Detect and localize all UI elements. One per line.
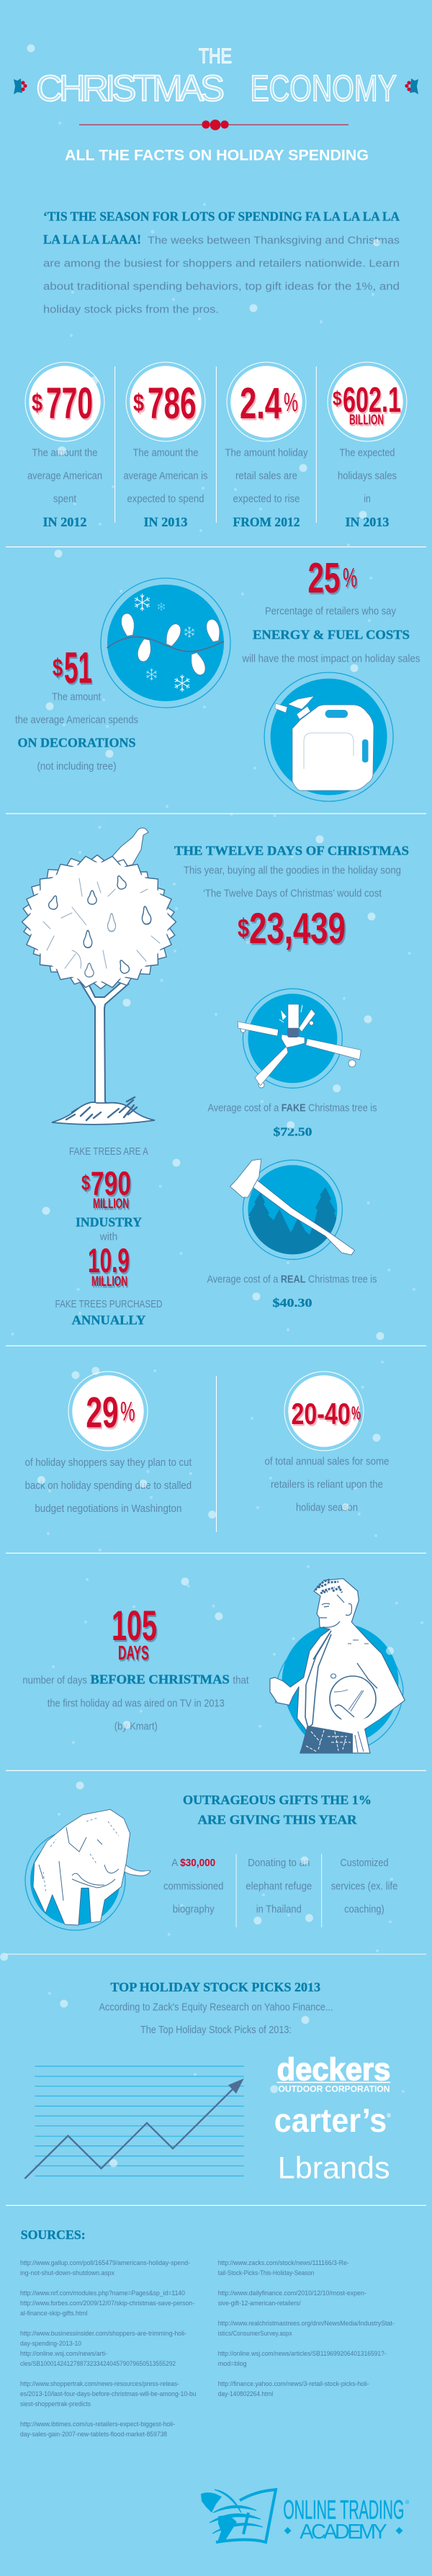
stat: 20-40% of annual sales: [265, 1372, 389, 1514]
sources right column: day-140802264.html: [218, 2390, 273, 2398]
stat: 2.4% from 2012: FROM 2012: [233, 515, 300, 529]
twelve days of christmas: [174, 843, 409, 953]
stat: $51 on decorations: (not including tree): [37, 761, 117, 773]
stat: 105 days before christmas: the first holiday ad was aired on TV in 2013: [48, 1698, 225, 1710]
stat: $770 in 2012: average American: [27, 470, 102, 482]
subtitle: ALL THE FACTS ON HOLIDAY SPENDING: [65, 146, 369, 164]
sources left column: cles/SB10001424127887323342404579079650513555292: [20, 2360, 176, 2368]
fake tree cost: $72.50: [274, 1125, 312, 1138]
sources left column: es/2013-10/last-four-days-before-christmas-will-be-among-10-bu: [20, 2390, 196, 2398]
stat: $602.1 billion in 2013: $: [333, 387, 342, 410]
stat: $602.1 billion in 2013: holidays sales: [338, 470, 397, 482]
stat: 25% energy and fuel costs: will have the most impact on holiday sales: [242, 654, 420, 665]
gift columns: coaching): [344, 1904, 384, 1915]
sources heading: SOURCES:: [21, 2228, 86, 2242]
stat: $786 in 2013: IN 2013: [144, 515, 187, 529]
stat: $602.1 billion in 2013: in: [364, 494, 371, 505]
stat: $770 in 2012: IN 2012: [43, 515, 86, 529]
shorts: [300, 1726, 353, 1753]
ornament divider with berries: [79, 120, 348, 130]
sources left column: http://www.ibtimes.com/us-retailers-expect-biggest-holi-: [20, 2420, 175, 2428]
stat: $51 on decorations: the average American spends: [15, 714, 138, 726]
sources left column: al-finance-skip-gifts.html: [20, 2310, 87, 2318]
gift columns: biography: [173, 1904, 215, 1915]
line chart with rising arrow: [24, 2066, 244, 2179]
fake tree cost: Average cost of a FAKE Christmas tree is: [207, 1102, 377, 1114]
intro paragraph: [43, 210, 400, 316]
logo: deckers: deckers: [277, 2052, 390, 2087]
twelve days of christmas: This year, buying all the goodies in the holiday song: [184, 865, 401, 876]
sources left column: [20, 2259, 196, 2438]
gift columns: commissioned: [163, 1881, 223, 1892]
sources left column: http://www.gallup.com/poll/165479/americans-holiday-spend-: [20, 2259, 190, 2267]
bird: [109, 828, 148, 868]
stat: $786 in 2013: [124, 362, 207, 529]
sources left column: ing-not-shut-down-shutdown.aspx: [20, 2269, 114, 2277]
stat: 105 days before christmas: BEFORE CHRISTMAS: [91, 1672, 230, 1686]
stat: $770 in 2012: spent: [53, 494, 76, 505]
stat: 2.4% from 2012: 2.4: [240, 379, 282, 428]
title: the: THE: [199, 45, 232, 68]
stat: 29% cutting back: budget negotiations in Washington: [35, 1503, 181, 1515]
stat: fake trees industry: MILLION: [91, 1274, 127, 1289]
sources left column: day-spending-2013-10: [20, 2340, 81, 2348]
sources left column: http://www.businessinsider.com/shoppers-are-trimming-holi-: [20, 2330, 186, 2338]
real tree cost: $40.30: [272, 1296, 312, 1310]
stat: 105 days before christmas: (by Kmart): [114, 1721, 158, 1733]
stock picks heading: The Top Holiday Stock Picks of 2013:: [140, 2025, 292, 2036]
face and ear: [320, 1595, 351, 1627]
stat: 29% cutting back: back on holiday spending due to stalled: [25, 1480, 192, 1492]
stat: $51 on decorations: $: [53, 654, 63, 682]
stat: 20-40% of annual sales: of total annual sales for some: [265, 1456, 389, 1468]
intro paragraph: are among the busiest for shoppers and retailers nationwide. Learn: [43, 258, 400, 270]
sources right column: http://online.wsj.com/news/articles/SB119699206401316591?-: [218, 2350, 387, 2358]
sources left column: http://www.nrf.com/modules.php?name=Pages&sp_id=1140: [20, 2289, 185, 2297]
outrageous gifts heading: OUTRAGEOUS GIFTS THE 1%: [183, 1793, 372, 1807]
pears: [48, 895, 60, 910]
stat: fake trees industry: with: [99, 1232, 117, 1243]
body: [270, 1579, 405, 1753]
stat: 105 days before christmas: DAYS: [118, 1641, 149, 1664]
stat: 29% cutting back: [25, 1372, 192, 1515]
hair: [315, 1580, 342, 1593]
stat: 20-40% of annual sales: retailers is reliant upon the: [271, 1480, 383, 1491]
stat: 20-40% of annual sales: 20-40: [291, 1397, 351, 1431]
stat: 29% cutting back: of holiday shoppers say they plan to cut: [25, 1457, 192, 1469]
sources right column: tail-Stock-Picks-This-Holiday-Season: [218, 2269, 314, 2277]
stat: fake trees industry: FAKE TREES ARE A: [69, 1146, 148, 1158]
twelve days of christmas: ‘The Twelve Days of Christmas’ would cost: [203, 888, 382, 899]
stat: 2.4% from 2012: %: [284, 387, 298, 417]
logo: online trading academy: [201, 2490, 410, 2544]
stat: $786 in 2013: expected to spend: [127, 494, 204, 505]
stat: 2.4% from 2012: [225, 362, 308, 529]
stat: $786 in 2013: average American is: [124, 470, 207, 482]
stock picks heading: [99, 1980, 333, 2036]
illustration: man with towel and ball: [270, 1579, 405, 1753]
icon: gas can circle: [264, 672, 393, 801]
ground mound: [52, 1102, 155, 1125]
logo: online trading academy: ACADEMY: [300, 2521, 387, 2544]
logo: online trading academy: ®: [405, 2500, 410, 2505]
stat: 25% energy and fuel costs: %: [343, 563, 357, 593]
outrageous gifts heading: [183, 1793, 372, 1827]
sources left column: http://www.forbes.com/2009/12/07/skip-christmas-save-person-: [20, 2300, 194, 2307]
stat: 25% energy and fuel costs: Percentage of retailers who say: [265, 606, 397, 618]
real tree cost: [207, 1274, 377, 1310]
sources right column: http://finance.yahoo.com/news/3-retail-stock-picks-holi-: [218, 2380, 369, 2388]
stat: 25% energy and fuel costs: 25: [308, 554, 340, 602]
sources left column: siest-shoppertrak-predicts: [20, 2400, 91, 2408]
stat: $770 in 2012: The amount the: [32, 447, 98, 459]
stat: $602.1 billion in 2013: 602.1: [343, 381, 401, 420]
stat: 20-40% of annual sales: holiday season: [296, 1503, 358, 1514]
stat: 105 days before christmas: that: [233, 1675, 249, 1686]
icon: holly left: [14, 78, 27, 94]
stat: 29% cutting back: %: [120, 1397, 135, 1427]
stat: 2.4% from 2012: expected to rise: [233, 494, 300, 505]
stat: 2.4% from 2012: retail sales are: [235, 470, 297, 482]
intro paragraph: LA LA LA LAAA!: [43, 233, 141, 247]
stat: fake trees industry: ANNUALLY: [72, 1312, 145, 1327]
stat: 105 days before christmas: number of days: [22, 1675, 87, 1686]
title block: [14, 45, 418, 164]
stat: $786 in 2013: $: [133, 389, 144, 417]
gift columns: in Thailand: [256, 1904, 302, 1915]
stat: $770 in 2012: 770: [46, 379, 93, 428]
illustration: partridge in a pear tree: [12, 828, 186, 1125]
real tree cost: Average cost of a REAL Christmas tree is: [207, 1274, 377, 1286]
stat: $602.1 billion in 2013: [328, 362, 407, 529]
stat: 25% energy and fuel costs: ENERGY & FUEL COSTS: [253, 627, 410, 641]
logo: carters: ®: [387, 2112, 391, 2119]
sources left column: http://www.shoppertrak.com/news-resources/press-releas-: [20, 2380, 179, 2388]
illustration: elephant: [25, 1809, 150, 1930]
title: christmas economy: CHRISTMAS: [36, 68, 225, 109]
stat: $770 in 2012: $: [32, 389, 42, 417]
stat: fake trees industry: MILLION: [93, 1196, 129, 1212]
stat: 2.4% from 2012: The amount holiday: [225, 447, 308, 459]
icon: holly right: [405, 78, 418, 94]
stat: 105 days before christmas: 105: [112, 1603, 157, 1649]
outrageous gifts heading: ARE GIVING THIS YEAR: [197, 1812, 358, 1827]
sources right column: sive-gift-12-american-retailers/: [218, 2300, 301, 2307]
intro paragraph: The weeks between Thanksgiving and Christmas: [148, 235, 400, 247]
intro paragraph: holiday stock picks from the pros.: [43, 304, 219, 316]
stat: fake trees industry: 790: [91, 1164, 131, 1202]
icon: christmas lights circle: [101, 578, 230, 708]
gift columns: Customized: [340, 1857, 389, 1869]
stat: 25% energy and fuel costs: [242, 554, 420, 665]
gift columns: [163, 1854, 397, 1927]
stat: fake trees industry: INDUSTRY: [76, 1215, 142, 1229]
stat: $786 in 2013: The amount the: [132, 447, 199, 459]
stat: $51 on decorations: 51: [64, 644, 92, 693]
intro paragraph: about traditional spending behaviors, top gift ideas for the 1%, and: [43, 281, 400, 293]
sources right column: [218, 2259, 395, 2398]
stat: $602.1 billion in 2013: BILLION: [349, 412, 384, 428]
twelve days of christmas: THE TWELVE DAYS OF CHRISTMAS: [174, 843, 409, 857]
logo: carters: carter’s: [274, 2102, 394, 2139]
sources right column: istics/ConsumerSurvey.aspx: [218, 2330, 292, 2338]
stat: fake trees industry: 10.9: [88, 1241, 130, 1279]
stock picks heading: According to Zack's Equity Research on Yahoo Finance...: [99, 2002, 333, 2014]
leaf strokes: [43, 878, 160, 968]
towel: [305, 1631, 331, 1728]
stat: fake trees industry: $: [81, 1171, 90, 1195]
stat: $51 on decorations: ON DECORATIONS: [17, 736, 135, 750]
icon: axe and forest circle: [230, 1159, 354, 1259]
sources right column: http://www.realchristmastrees.org/dnn/NewsMedia/IndustryStat-: [218, 2320, 395, 2328]
ball and arm: [330, 1676, 376, 1722]
stat: $770 in 2012: [25, 362, 104, 529]
sources right column: http://www.zacks.com/stock/news/111166/3-Re-: [218, 2259, 349, 2267]
book and globe mark: [201, 2490, 276, 2542]
gift columns: services (ex. life: [331, 1881, 397, 1892]
gift columns: A $30,000: [171, 1857, 215, 1869]
stat: 29% cutting back: 29: [86, 1389, 119, 1437]
sources left column: http://online.wsj.com/news/arti-: [20, 2350, 107, 2358]
twelve days of christmas: $: [238, 914, 249, 943]
fake tree cost: [207, 1102, 377, 1138]
sources left column: day-sales-gain-2007-new-tablets-flood-market-859738: [20, 2431, 167, 2438]
stat: $51 on decorations: The amount: [52, 691, 101, 703]
stat: 20-40% of annual sales: %: [351, 1402, 361, 1424]
logo: l brands: Lbrands: [278, 2151, 390, 2186]
icon: fake tree stand: [238, 988, 361, 1088]
crown: [12, 844, 186, 1000]
stat: $602.1 billion in 2013: The expected: [340, 447, 395, 459]
gift columns: elephant refuge: [246, 1881, 312, 1892]
stock picks heading: TOP HOLIDAY STOCK PICKS 2013: [110, 1980, 320, 1994]
sources right column: http://www.dailyfinance.com/2010/12/10/most-expen-: [218, 2289, 366, 2297]
stat: $786 in 2013: 786: [148, 379, 196, 428]
stat: $51 on decorations: [15, 644, 138, 773]
stat: fake trees industry: FAKE TREES PURCHASED: [55, 1299, 163, 1310]
logo: deckers: OUTDOOR CORPORATION: [278, 2084, 390, 2094]
stat: 105 days before christmas: [22, 1603, 249, 1733]
gift columns: Donating to an: [248, 1857, 310, 1869]
stat: $602.1 billion in 2013: IN 2013: [346, 515, 389, 529]
trunk and branches: [81, 983, 128, 1106]
title: christmas economy: [36, 68, 397, 109]
sources right column: mod=blog: [218, 2360, 247, 2368]
stat: fake trees industry: [55, 1146, 163, 1327]
stat row dividers: [115, 366, 316, 523]
intro paragraph: ‘TIS THE SEASON FOR LOTS OF SPENDING FA LA LA LA LA: [43, 210, 400, 224]
twelve days of christmas: 23,439: [249, 904, 346, 953]
